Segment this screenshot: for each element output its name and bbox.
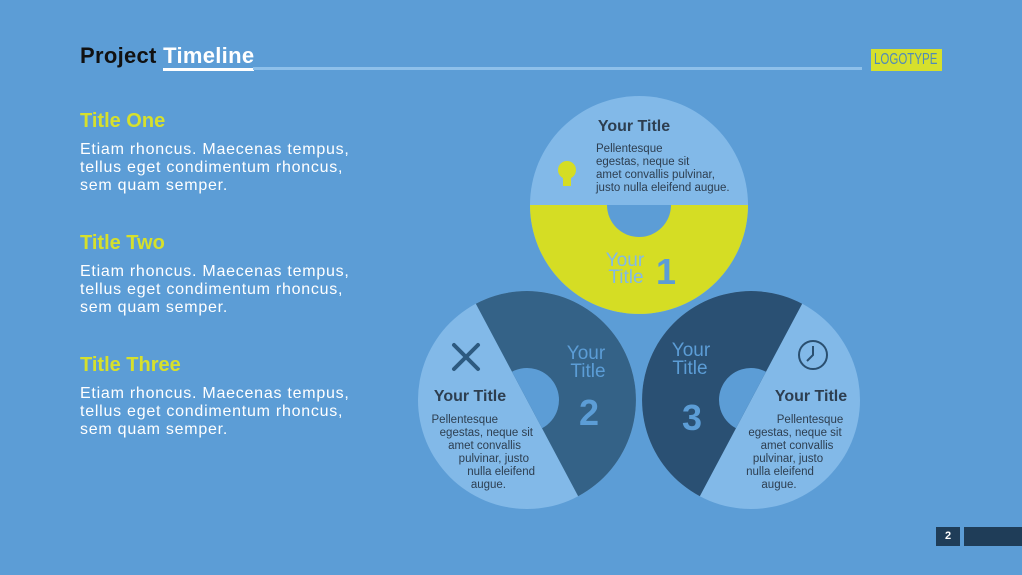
icon: tools	[454, 345, 478, 369]
text block 1: sem quam semper.	[80, 177, 228, 194]
circle 1: egestas, neque sit	[596, 156, 690, 168]
circle 2: pulvinar, justo	[459, 453, 529, 465]
text block 2: sem quam semper.	[80, 299, 228, 316]
footer bar	[964, 527, 1022, 546]
circle 1: amet convallis pulvinar,	[596, 169, 715, 181]
circle 2: Your	[567, 343, 606, 364]
circle 2: Pellentesque	[432, 414, 498, 426]
circle 3: Title	[672, 358, 708, 379]
text block 3: sem quam semper.	[80, 421, 228, 438]
circle 1: Title	[608, 267, 644, 288]
text block 3: tellus eget condimentum rhoncus,	[80, 403, 343, 420]
circle 1: justo nulla eleifend augue.	[595, 182, 730, 194]
circle 2: Your Title	[434, 388, 506, 405]
page number: 2	[945, 530, 951, 542]
circle 2: Title	[570, 361, 606, 382]
icon: clock	[799, 341, 827, 369]
circle 3: 3	[682, 397, 702, 438]
text block 1: tellus eget condimentum rhoncus,	[80, 159, 343, 176]
logo	[871, 49, 942, 71]
text block 2	[80, 232, 350, 316]
text block 3: Title Three	[80, 354, 181, 376]
circle 3: Pellentesque	[777, 414, 843, 426]
circle 3	[604, 253, 860, 509]
page number	[936, 527, 960, 546]
text block 2: Title Two	[80, 232, 165, 254]
title: Project Timeline	[80, 43, 254, 68]
circle 1: Pellentesque	[596, 143, 662, 155]
text block 2: Etiam rhoncus. Maecenas tempus,	[80, 263, 350, 280]
circle 2: nulla eleifend	[467, 466, 535, 478]
text block 1	[80, 110, 350, 194]
header line	[253, 67, 862, 70]
circle 2: egestas, neque sit	[440, 427, 534, 439]
circle 1: Your	[606, 250, 645, 271]
text block 2: tellus eget condimentum rhoncus,	[80, 281, 343, 298]
circle 3: augue.	[761, 479, 797, 491]
circle 2: augue.	[471, 479, 506, 491]
circle 3: Your	[672, 340, 711, 361]
logo: LOGOTYPE	[874, 51, 937, 68]
circle 3: amet convallis	[761, 440, 834, 452]
circle 1: Your Title	[598, 118, 670, 135]
circle 3: pulvinar, justo	[753, 453, 823, 465]
circle 2: amet convallis	[448, 440, 521, 452]
circle 2	[418, 253, 674, 509]
text block 1: Title One	[80, 110, 165, 132]
circle 1: 1	[656, 251, 676, 292]
text block 3: Etiam rhoncus. Maecenas tempus,	[80, 385, 350, 402]
text block 1: Etiam rhoncus. Maecenas tempus,	[80, 141, 350, 158]
circle 2: 2	[579, 392, 599, 433]
text block 3	[80, 354, 350, 438]
circle 3: nulla eleifend	[746, 466, 814, 478]
circle 1	[530, 96, 748, 314]
icon: bulb	[558, 161, 576, 186]
circle 3: Your Title	[775, 388, 847, 405]
circle 3: egestas, neque sit	[748, 427, 842, 439]
